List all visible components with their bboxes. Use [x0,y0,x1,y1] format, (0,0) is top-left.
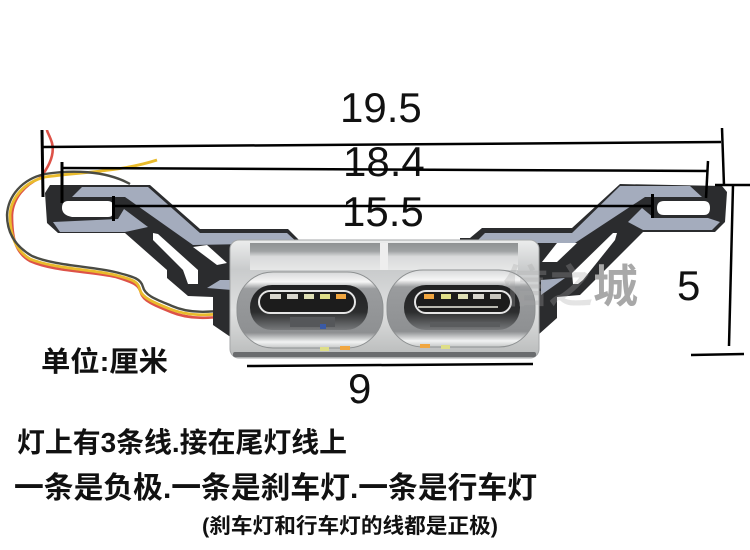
dimension: 15.5: 15.5 [342,188,424,235]
left bracket [45,185,300,340]
right bracket [460,184,727,335]
wire: yellow [10,160,232,315]
wire: dark [7,172,232,312]
note line 3: (刹车灯和行车灯的线都是正极) [202,515,498,538]
unit label: 单位:厘米 [41,345,168,377]
dimension: 9: 9 [348,365,371,412]
dimension: 5: 5 [677,262,700,309]
dimension: 18.4 [62,138,708,203]
wire harness [7,130,232,318]
note line 1: 灯上有3条线.接在尾灯线上 [17,427,347,458]
dimension: 5 [677,185,750,355]
dimension: 19.5 [42,84,724,197]
dimension: 18.4: 18.4 [343,138,425,185]
note line 2: 一条是负极.一条是刹车灯.一条是行车灯 [14,472,537,505]
lamp housing [230,240,539,358]
left light ring [237,272,383,351]
wire: red [12,130,232,318]
right light ring [387,270,535,349]
dimension: 19.5: 19.5 [340,84,422,131]
watermark: 信之城 [503,261,638,312]
lens top ribbed window [250,243,518,270]
